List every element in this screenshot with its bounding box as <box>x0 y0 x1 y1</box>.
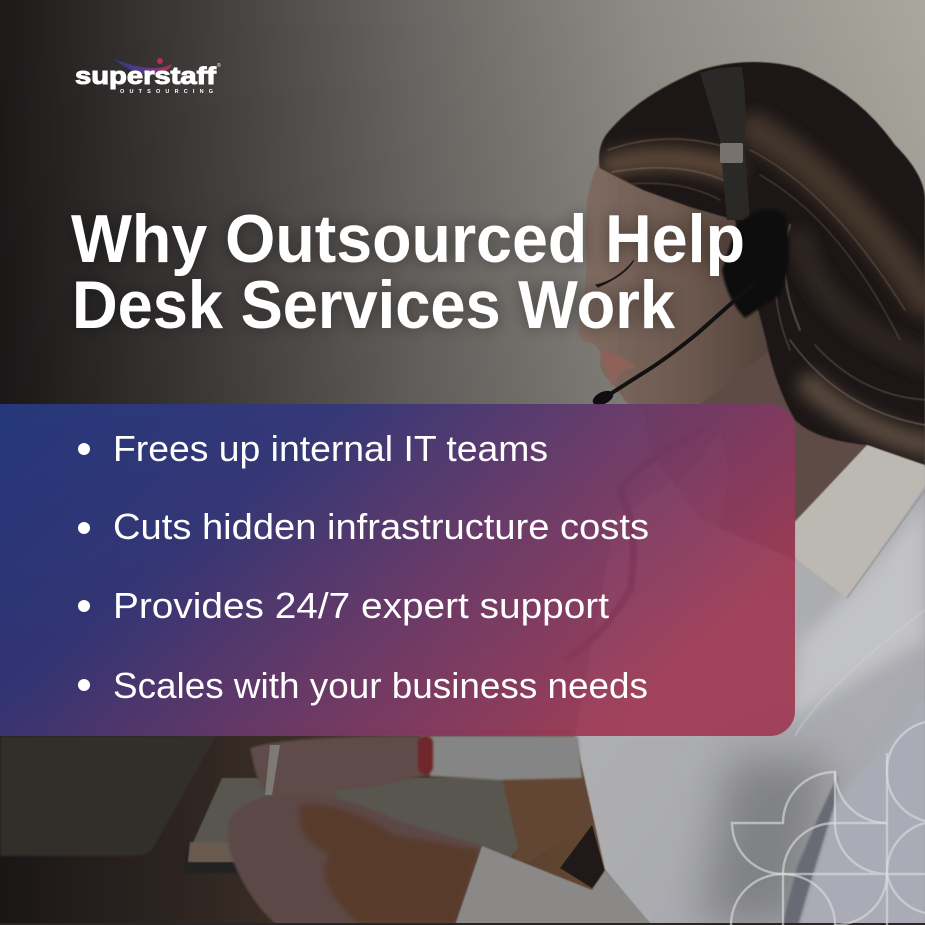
logo swoosh <box>114 59 172 75</box>
brown highlights <box>608 130 925 445</box>
rolled sleeve <box>420 736 582 780</box>
lapel seen through panel <box>620 432 795 736</box>
logo dot <box>157 58 163 64</box>
laptop <box>0 736 216 856</box>
eye <box>596 260 634 287</box>
collar <box>795 445 925 598</box>
title: Desk Services Work <box>72 267 675 343</box>
shirt folds <box>700 500 925 925</box>
dark gap beneath desk <box>560 825 605 888</box>
logo wordmark: superstaff <box>75 63 217 90</box>
panel background <box>0 404 795 736</box>
neck <box>640 330 870 560</box>
decorative outline pattern <box>731 722 925 925</box>
hands on notebook <box>228 736 652 925</box>
hair wisp over shirt, seen through panel <box>565 430 705 660</box>
desk <box>0 730 640 925</box>
bullet: 24/7 support: Provides 24/7 expert support <box>113 585 609 626</box>
logo: superstaff outsourcing <box>75 58 221 95</box>
logo registered mark: ® <box>217 62 221 69</box>
bottom edge strip <box>0 923 925 925</box>
logo tagline: OUTSOURCING <box>120 89 213 95</box>
wood desk edge <box>500 778 595 862</box>
title: Why Outsourced Help <box>71 201 745 277</box>
lips <box>600 352 636 388</box>
bullet: cuts costs: Cuts hidden infrastructure costs <box>113 506 649 547</box>
notebook <box>184 778 518 873</box>
panel: benefits list <box>0 404 795 736</box>
hair <box>565 62 925 660</box>
face <box>578 160 770 420</box>
shirt cuff <box>455 846 652 925</box>
shirt <box>575 440 925 925</box>
bullet: scales: Scales with your business needs <box>113 665 648 706</box>
bullet: frees up: Frees up internal IT teams <box>113 428 548 469</box>
headset <box>590 67 789 408</box>
title <box>71 201 745 343</box>
